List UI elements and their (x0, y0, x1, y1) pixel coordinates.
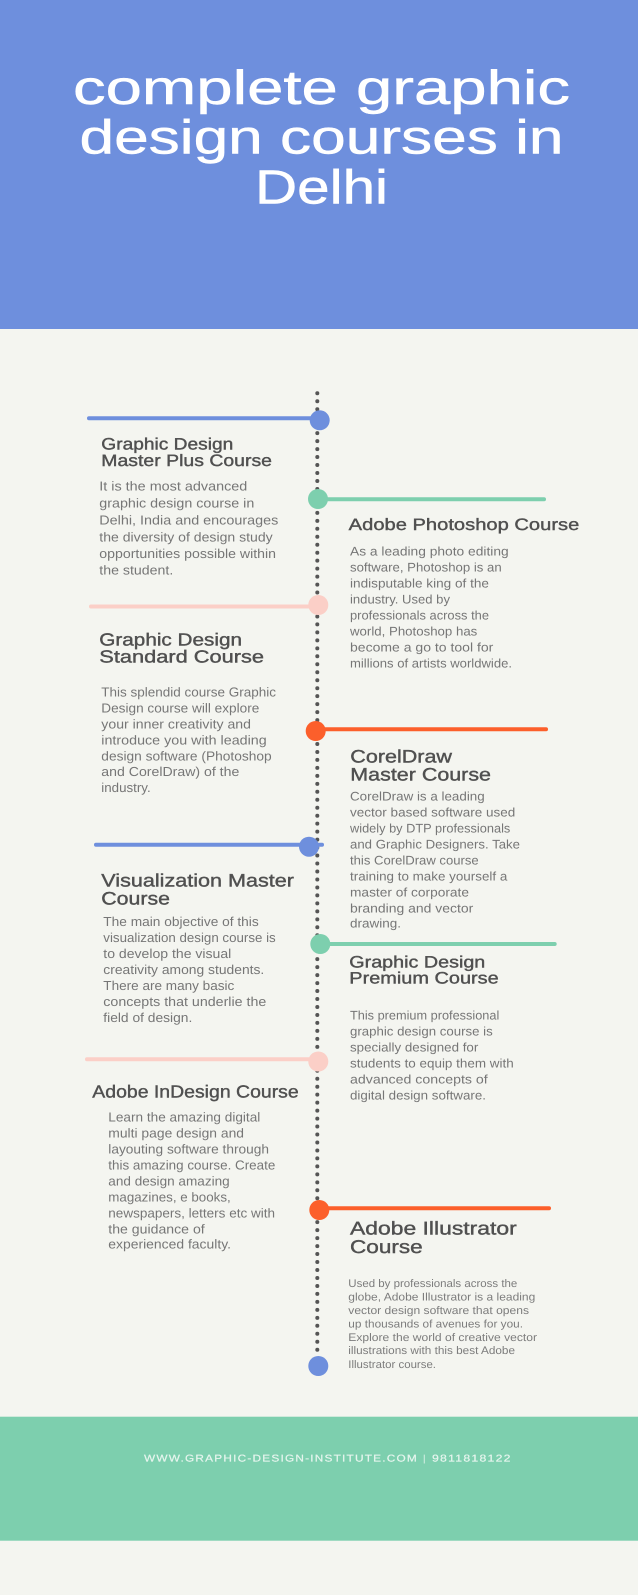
heading: Course (101, 889, 170, 909)
heading: Master Plus Course (101, 452, 272, 470)
body text: introduce you with leading (101, 733, 267, 748)
header banner (0, 0, 638, 329)
body text (108, 1109, 275, 1251)
body text: and Graphic Designers. Take (350, 837, 520, 851)
connector: pink (91, 595, 328, 615)
footer band (0, 1417, 638, 1541)
heading: Adobe Photoshop Course (349, 516, 579, 534)
heading: Standard Course (99, 647, 264, 667)
heading: Master Course (350, 765, 491, 785)
body text: magazines, e books, (108, 1189, 231, 1204)
panel: Adobe Photoshop Course (308, 489, 579, 671)
body text: layouting software through (108, 1141, 269, 1156)
body text: graphic design course is (350, 1024, 493, 1038)
footer contact text: 9811818122 (432, 1453, 512, 1464)
heading: Graphic Design (101, 435, 233, 453)
body text: and design amazing (108, 1173, 230, 1188)
body text: professionals across the (350, 609, 489, 623)
panel: Graphic Design Premium Course (310, 934, 555, 1102)
body text: this amazing course. Create (108, 1157, 275, 1172)
panel: Adobe InDesign Course (87, 1052, 328, 1251)
connector: orange (309, 1200, 549, 1220)
connector: green (308, 489, 544, 509)
body text: the guidance of (108, 1221, 205, 1236)
body text: There are many basic (103, 978, 235, 993)
timeline end dot (308, 1356, 328, 1376)
body text: newspapers, letters etc with (108, 1205, 275, 1220)
body text: training to make yourself a (350, 869, 507, 883)
connector: orange (306, 721, 546, 741)
heading (350, 746, 491, 785)
panel: CorelDraw Master Course (306, 721, 546, 930)
body text (103, 914, 276, 1025)
body text: experienced faculty. (108, 1236, 231, 1251)
body text: specially designed for (350, 1040, 478, 1054)
connector: pink (87, 1052, 328, 1072)
body text: digital design software. (350, 1088, 486, 1102)
title (73, 62, 570, 214)
body text: become a go to tool for (350, 641, 493, 655)
body text: branding and vector (350, 901, 473, 915)
body text: to develop the visual (103, 946, 231, 961)
dotted timeline (315, 393, 319, 1352)
body text: design software (Photoshop (101, 748, 272, 763)
body text: globe, Adobe Illustrator is a leading (348, 1291, 535, 1303)
body text: vector design software that opens (348, 1305, 530, 1317)
heading (99, 630, 264, 667)
connector: green (310, 934, 555, 954)
body text: Design course will explore (101, 701, 259, 716)
body text: drawing. (350, 916, 401, 930)
heading (349, 954, 499, 988)
heading: Premium Course (349, 970, 499, 988)
body text: this CorelDraw course (350, 853, 479, 867)
body text: concepts that underlie the (103, 994, 266, 1009)
body text: the student. (99, 563, 173, 578)
body text (349, 545, 512, 671)
body text: advanced concepts of (350, 1072, 488, 1086)
body text: It is the most advanced (99, 479, 247, 494)
body text: Used by professionals across the (348, 1278, 517, 1290)
footer contact text: | (423, 1453, 425, 1464)
body text (99, 479, 279, 578)
body text: creativity among students. (103, 962, 264, 977)
body text: field of design. (103, 1010, 192, 1025)
body text: up thousands of avenues for you. (348, 1318, 523, 1330)
body text: industry. (101, 780, 151, 795)
body text: As a leading photo editing (350, 545, 509, 559)
body text: opportunities possible within (99, 546, 276, 561)
heading: Adobe Illustrator (350, 1218, 517, 1239)
heading: Visualization Master (101, 871, 294, 891)
connector: blue (89, 410, 330, 430)
panel: Graphic Design Master Plus Course (89, 410, 330, 578)
body text: Explore the world of creative vector (348, 1332, 537, 1344)
body text: widely by DTP professionals (349, 821, 510, 835)
body text: master of corporate (350, 885, 469, 899)
body text: millions of artists worldwide. (350, 657, 512, 671)
heading: Adobe InDesign Course (92, 1081, 299, 1101)
body text: software, Photoshop is an (350, 561, 502, 575)
body text: visualization design course is (103, 930, 276, 945)
body text: the diversity of design study (99, 529, 273, 544)
body text: and CorelDraw) of the (101, 764, 239, 779)
panel: Visualization Master Course (96, 837, 322, 1025)
heading (350, 1218, 517, 1257)
connector: blue (96, 837, 322, 857)
body text: Illustrator course. (348, 1359, 436, 1371)
heading (101, 435, 272, 470)
body text: This splendid course Graphic (101, 685, 277, 700)
heading: Graphic Design (99, 630, 242, 650)
body text: Delhi, India and encourages (99, 513, 279, 528)
body text: industry. Used by (350, 592, 451, 606)
body text: Learn the amazing digital (108, 1109, 260, 1124)
body text (348, 1278, 537, 1371)
panel: Adobe Illustrator Course (309, 1200, 549, 1371)
body text: students to equip them with (350, 1056, 514, 1070)
footer contact text: WWW.GRAPHIC-DESIGN-INSTITUTE.COM (144, 1453, 418, 1464)
body text: The main objective of this (103, 914, 259, 929)
body text: vector based software used (350, 805, 515, 819)
body text: multi page design and (108, 1125, 244, 1140)
body text: illustrations with this best Adobe (348, 1345, 515, 1357)
body text (101, 685, 277, 795)
title: complete graphic (73, 62, 570, 115)
title: design courses in (80, 112, 564, 164)
body text: world, Photoshop has (349, 625, 477, 639)
body text: CorelDraw is a leading (350, 789, 485, 803)
body text: indisputable king of the (350, 577, 489, 591)
body text (349, 789, 520, 930)
heading: Graphic Design (349, 954, 485, 972)
title: Delhi (255, 161, 388, 214)
body text: This premium professional (350, 1008, 499, 1022)
heading: CorelDraw (350, 746, 453, 766)
body text: your inner creativity and (101, 717, 251, 732)
heading (101, 871, 294, 909)
heading: Course (350, 1236, 423, 1257)
footer contact text (144, 1453, 512, 1464)
panel: Graphic Design Standard Course (91, 595, 328, 795)
body text (350, 1008, 514, 1102)
body text: graphic design course in (99, 496, 254, 511)
